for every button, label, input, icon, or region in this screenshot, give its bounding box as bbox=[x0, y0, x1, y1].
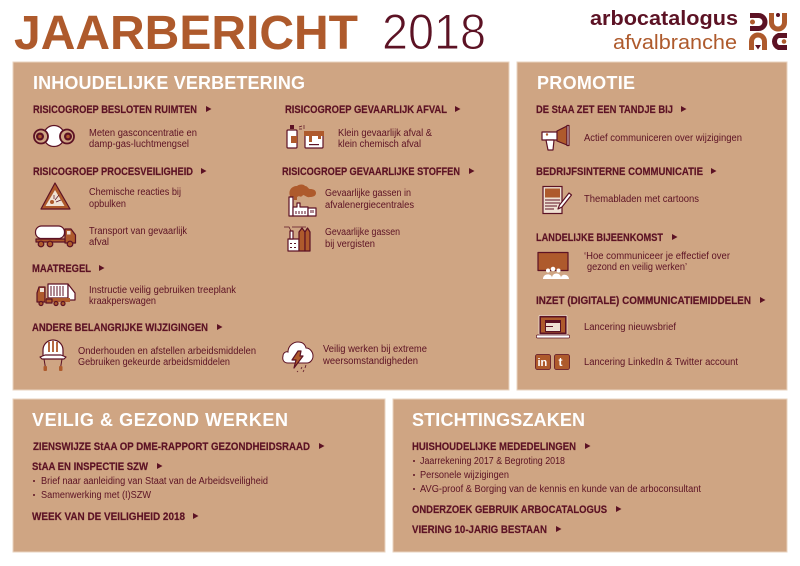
section: risicogroep gevaarlijke stoffen: afvalenergiecentrales bbox=[325, 200, 414, 211]
section: andere belangrijke wijzigingen: ANDERE BELANGRIJKE WIJZIGINGEN bbox=[32, 322, 208, 334]
section: maatregel bbox=[32, 263, 237, 307]
text: veilig werken bij extreme weersomstandigheden bbox=[322, 344, 427, 367]
heading: promotie: PROMOTIE bbox=[537, 73, 635, 93]
icon: garbage truck bbox=[37, 284, 75, 306]
section: bedrijfsinterne communicatie: BEDRIJFSINTERNE COMMUNICATIE bbox=[536, 166, 703, 178]
text: gevaarlijke gassen bij vergisten: Gevaarlijke gassen bbox=[325, 227, 400, 238]
section: maatregel: MAATREGEL bbox=[32, 263, 91, 275]
icon: gas mask bbox=[34, 126, 74, 146]
section: risicogroep gevaarlijk afval: RISICOGROEP GEVAARLIJK AFVAL bbox=[285, 104, 447, 116]
icon: tanker truck bbox=[36, 226, 76, 247]
heading: inhoudelijke verbetering: INHOUDELIJKE VERBETERING bbox=[33, 73, 305, 93]
section: risicogroep procesveiligheid: RISICOGROEP PROCESVEILIGHEID bbox=[33, 166, 193, 178]
section: huishoudelijke mededelingen: HUISHOUDELIJKE MEDEDELINGEN bbox=[412, 441, 576, 453]
section: risicogroep gevaarlijk afval: klein chemisch afval bbox=[338, 139, 421, 150]
section: risicogroep procesveiligheid: Chemische reacties bij bbox=[89, 187, 181, 198]
section: bedrijfsinterne communicatie: Themabladen met cartoons bbox=[584, 194, 699, 205]
heading: veilig en gezond werken: VEILIG & GEZOND WERKEN bbox=[32, 410, 288, 430]
icon: document with pencil bbox=[543, 186, 572, 214]
title bbox=[14, 4, 486, 60]
text: veilig werken bij extreme weersomstandigheden: weersomstandigheden bbox=[322, 356, 418, 367]
section: andere belangrijke wijzigingen: Gebruiken gekeurde arbeidsmiddelen bbox=[78, 357, 230, 368]
section: risicogroep gevaarlijke stoffen: Gevaarlijke gassen in bbox=[325, 188, 411, 199]
logo: arbocatalogus afvalbranche: afvalbranche bbox=[613, 32, 737, 54]
section: landelijke bijeenkomst: ‘Hoe communiceer je effectief over bbox=[584, 251, 731, 262]
section: staa en inspectie szw: Brief naar aanleiding van Staat van de Arbeidsveiligheid bbox=[41, 476, 268, 487]
text: lancering linkedin en twitter: Lancering LinkedIn & Twitter account bbox=[584, 357, 738, 368]
section: maatregel: Instructie veilig gebruiken treeplank bbox=[89, 285, 237, 296]
text: transport van gevaarlijk afval: Transport van gevaarlijk bbox=[89, 226, 188, 237]
icon: explosion hazard triangle bbox=[41, 183, 70, 209]
section: onderzoek gebruik arbocatalogus: ONDERZOEK GEBRUIK ARBOCATALOGUS bbox=[412, 504, 607, 516]
section: inzet digitale communicatiemiddelen: Lancering nieuwsbrief bbox=[584, 322, 676, 333]
section: risicogroep besloten ruimten bbox=[33, 104, 212, 150]
text: transport van gevaarlijk afval: afval bbox=[89, 237, 109, 248]
title: JAARBERICHT bbox=[14, 7, 358, 60]
panel: inhoudelijke verbetering bbox=[13, 62, 509, 390]
section: week van de veiligheid: WEEK VAN DE VEILIGHEID 2018 bbox=[32, 511, 185, 523]
section: huishoudelijke mededelingen: Personele wijzigingen bbox=[420, 470, 509, 481]
icon: laptop newsletter bbox=[536, 316, 570, 338]
heading: stichtingszaken: STICHTINGSZAKEN bbox=[412, 410, 585, 430]
text: veilig werken bij extreme weersomstandigheden: Veilig werken bij extreme bbox=[323, 344, 427, 355]
icon: linkedin bbox=[536, 354, 550, 370]
section: risicogroep gevaarlijk afval: Klein gevaarlijk afval & bbox=[338, 128, 432, 139]
section: inzet digitale communicatiemiddelen: INZET (DIGITALE) COMMUNICATIEMIDDELEN bbox=[536, 295, 751, 307]
icon: presentation screen with audience bbox=[538, 252, 569, 279]
section: andere belangrijke wijzigingen: Onderhouden en afstellen arbeidsmiddelen bbox=[78, 346, 256, 357]
logo: arbocatalogus afvalbranche bbox=[590, 8, 787, 54]
section: staa en inspectie szw bbox=[32, 461, 268, 501]
panel: promotie bbox=[517, 62, 787, 390]
section: staa en inspectie szw: StAA EN INSPECTIE SZW bbox=[32, 461, 149, 473]
section: zienswijze staa: ZIENSWIJZE StAA OP DME-RAPPORT GEZONDHEIDSRAAD bbox=[33, 441, 310, 453]
icon: factory with smoke bbox=[289, 184, 316, 216]
panel: stichtingszaken bbox=[393, 399, 787, 552]
text: gevaarlijke gassen bij vergisten: bij vergisten bbox=[325, 239, 375, 250]
section: risicogroep gevaarlijke stoffen: RISICOGROEP GEVAARLIJKE STOFFEN bbox=[282, 166, 460, 178]
panel: veilig en gezond werken bbox=[13, 399, 385, 552]
section: landelijke bijeenkomst: LANDELIJKE BIJEENKOMST bbox=[536, 232, 663, 244]
icon: megaphone bbox=[542, 126, 569, 150]
text: gevaarlijke gassen bij vergisten bbox=[325, 227, 400, 250]
icon: linkedin: in bbox=[538, 357, 548, 369]
section: inzet digitale communicatiemiddelen bbox=[536, 295, 766, 333]
text: transport van gevaarlijk afval bbox=[89, 226, 188, 248]
section: risicogroep gevaarlijke stoffen bbox=[282, 166, 474, 211]
section: risicogroep besloten ruimten: damp-gas-luchtmengsel bbox=[89, 139, 189, 150]
section: landelijke bijeenkomst: gezond en veilig werken’ bbox=[587, 262, 687, 273]
section: risicogroep procesveiligheid bbox=[33, 166, 206, 210]
section: de staa zet een tandje bij bbox=[536, 104, 742, 144]
section: risicogroep gevaarlijk afval bbox=[285, 104, 460, 150]
icon: safety helmet bbox=[40, 340, 66, 371]
section: bedrijfsinterne communicatie bbox=[536, 166, 716, 205]
section: risicogroep besloten ruimten: RISICOGROEP BESLOTEN RUIMTEN bbox=[33, 104, 197, 116]
section: maatregel: kraakperswagen bbox=[89, 296, 156, 307]
section: staa en inspectie szw: Samenwerking met (I)SZW bbox=[41, 490, 152, 501]
section: viering 10-jarig bestaan: VIERING 10-JARIG BESTAAN bbox=[412, 524, 547, 536]
icon: twitter: t bbox=[558, 355, 562, 369]
section: risicogroep procesveiligheid: opbulken bbox=[89, 199, 126, 210]
section: risicogroep besloten ruimten: Meten gasconcentratie en bbox=[89, 128, 197, 139]
icon: spray can and paint bucket bbox=[287, 125, 324, 148]
section: huishoudelijke mededelingen: Jaarrekening 2017 & Begroting 2018 bbox=[420, 456, 565, 467]
icon: digester with gas tanks bbox=[284, 227, 310, 251]
logo: arbocatalogus afvalbranche: arbocatalogus bbox=[590, 8, 738, 30]
icon: storm cloud bbox=[283, 342, 313, 372]
section: de staa zet een tandje bij: DE StAA ZET EEN TANDJE BIJ bbox=[536, 104, 673, 116]
section: huishoudelijke mededelingen bbox=[412, 441, 701, 495]
icon: twitter bbox=[554, 354, 570, 370]
title: 2018 bbox=[382, 4, 486, 60]
section: de staa zet een tandje bij: Actief communiceren over wijzigingen bbox=[584, 133, 742, 144]
section: andere belangrijke wijzigingen bbox=[32, 322, 256, 368]
section: landelijke bijeenkomst bbox=[536, 232, 731, 273]
section: huishoudelijke mededelingen: AVG-proof & Borging van de kennis en kunde van de arboconsultant bbox=[420, 484, 701, 495]
